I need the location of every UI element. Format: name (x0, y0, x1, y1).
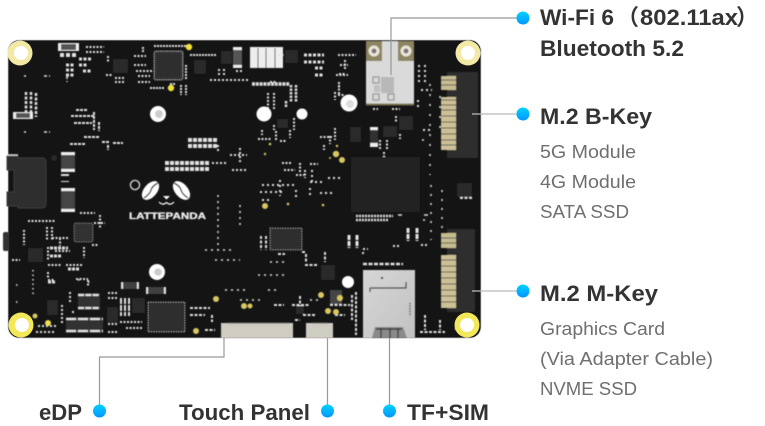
logo (129, 178, 206, 222)
callout: Wi-Fi and Bluetooth (391, 5, 758, 75)
logo: LATTEPANDA (129, 211, 206, 222)
callout: eDP: eDP (39, 400, 82, 425)
left connector (7, 152, 75, 212)
callout: Wi-Fi and Bluetooth: 802.11ax (640, 5, 739, 30)
callout: Wi-Fi and Bluetooth: Wi-Fi 6 (540, 5, 614, 30)
callout: eDP (39, 338, 224, 425)
callout: M.2 M-Key: NVME SSD (540, 379, 637, 399)
callout: Wi-Fi and Bluetooth: ） (736, 5, 758, 30)
centre components (149, 47, 473, 335)
callout: TF+SIM: TF+SIM (407, 400, 489, 425)
callout: M.2 B-Key (472, 104, 653, 222)
callout: M.2 B-Key: 5G Module (540, 142, 636, 162)
touch panel connector (306, 323, 333, 338)
gold test points (32, 44, 345, 334)
mounting hole bottom right (454, 312, 480, 338)
callout: Touch Panel (179, 338, 334, 425)
callout: M.2 B-Key: SATA SSD (540, 202, 629, 222)
lower-left components (12, 213, 185, 333)
M.2 M-Key slot (441, 229, 475, 312)
callout: M.2 M-Key (472, 281, 713, 399)
callout: Wi-Fi and Bluetooth: （ (617, 5, 639, 30)
eDP connector (221, 323, 293, 338)
M.2 B-Key slot (441, 72, 478, 158)
mounting hole top right (456, 40, 480, 66)
mounting hole bottom left (8, 312, 34, 338)
left-middle components (13, 92, 248, 170)
top-left components (24, 43, 250, 132)
audio jack (3, 232, 9, 251)
circuit board (3, 40, 481, 338)
callout: M.2 M-Key: (Via Adapter Cable) (540, 349, 713, 369)
callout: TF+SIM (383, 338, 489, 425)
callout: M.2 B-Key: 4G Module (540, 172, 636, 192)
callout: M.2 B-Key: M.2 B-Key (540, 104, 653, 129)
Wi-Fi module (366, 41, 414, 106)
callout: Wi-Fi and Bluetooth: Bluetooth 5.2 (540, 36, 684, 61)
callout: M.2 M-Key: M.2 M-Key (540, 281, 659, 306)
callout: M.2 M-Key: Graphics Card (540, 319, 665, 339)
callout: Touch Panel: Touch Panel (179, 400, 310, 425)
mounting hole top left (8, 40, 32, 66)
TF and SIM card slot (363, 270, 415, 338)
